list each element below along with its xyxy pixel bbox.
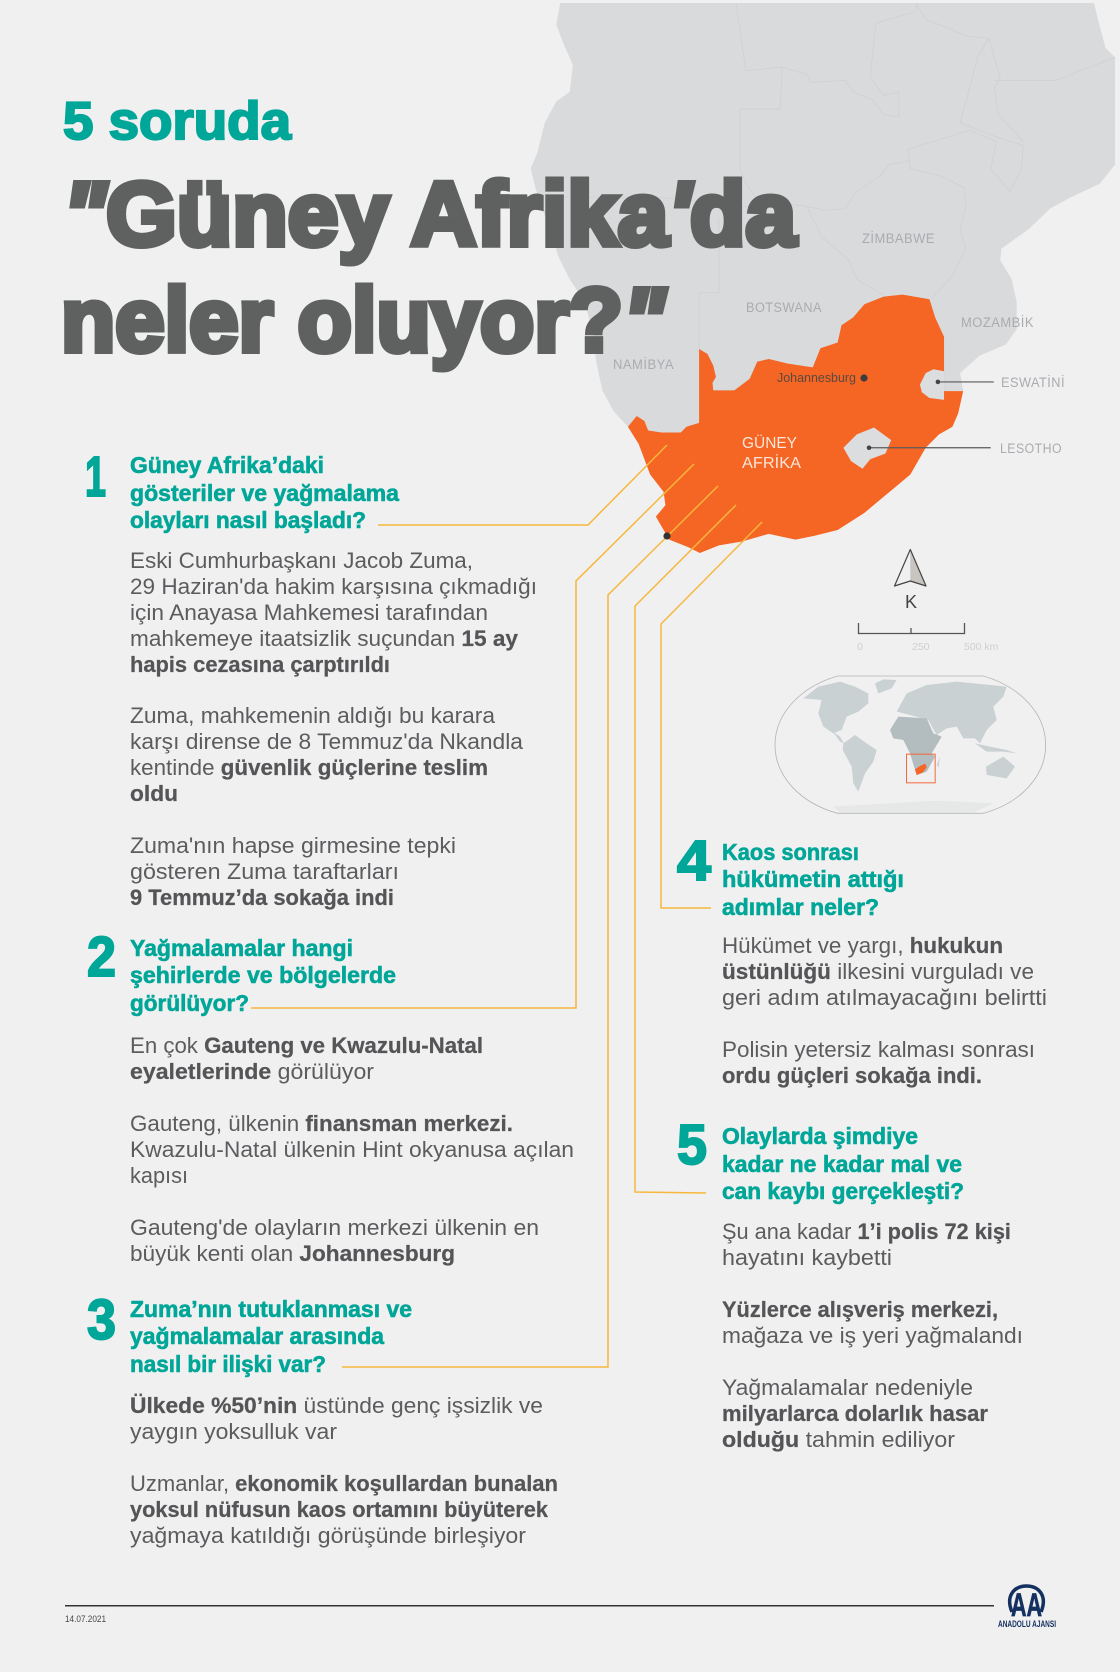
logo: Anadolu Ajansi (998, 1586, 1056, 1630)
answer 5: olduğu tahmin ediliyor (722, 1427, 956, 1452)
number 5: 5 (677, 1113, 707, 1177)
question 3: yağmalamalar arasında (130, 1323, 384, 1349)
answer 1: Zuma, mahkemenin aldığı bu karara (130, 703, 495, 728)
answer 5: hayatını kaybetti (722, 1245, 892, 1270)
question 1: gösteriler ve yağmalama (130, 480, 399, 506)
question 3 (130, 1296, 412, 1377)
answer 2: eyaletlerinde görülüyor (130, 1059, 375, 1084)
answer 3: yaygın yoksulluk var (130, 1419, 338, 1444)
answer 2: Gauteng'de olayların merkezi ülkenin en (130, 1215, 539, 1240)
answer 5: Şu ana kadar 1’i polis 72 kişi (722, 1219, 1011, 1244)
title line 2: neler oluyor?" (61, 271, 666, 371)
answer 2: büyük kenti olan Johannesburg (130, 1241, 455, 1266)
question 4: Kaos sonrası (722, 839, 859, 865)
logo: Anadolu Ajansi: ANADOLU AJANSI (998, 1619, 1056, 1630)
compass (894, 550, 926, 612)
question 1 (130, 452, 399, 533)
answer 3: Ülkede %50’nin üstünde genç işsizlik ve (130, 1393, 543, 1418)
scale bar: 250 (912, 641, 930, 653)
map labels: ESWATİNİ (1001, 375, 1065, 390)
section 2 (87, 925, 574, 1266)
answer 5: milyarlarca dolarlık hasar (722, 1401, 988, 1426)
answer 5: Yüzlerce alışveriş merkezi, (722, 1297, 998, 1322)
South Africa (628, 295, 963, 553)
question 3: nasıl bir ilişki var? (130, 1351, 326, 1377)
answer 1: gösteren Zuma taraftarları (130, 859, 399, 884)
answer 5: Yağmalamalar nedeniyle (722, 1375, 973, 1400)
title (61, 92, 797, 371)
section 5 (677, 1113, 1023, 1452)
answer 2: En çok Gauteng ve Kwazulu-Natal (130, 1033, 483, 1058)
leader lines (867, 380, 994, 450)
land mass (531, 3, 1115, 459)
answer 4: üstünlüğü ilkesini vurguladı ve (722, 959, 1034, 984)
answer 4: ordu güçleri sokağa indi. (722, 1063, 982, 1088)
question 2 (130, 935, 396, 1016)
map labels: ZİMBABWE (862, 231, 935, 246)
answer 5 (722, 1219, 1023, 1452)
answer 2 (130, 1033, 574, 1266)
answer 3: Uzmanlar, ekonomik koşullardan bunalan (130, 1471, 558, 1496)
number 4: 4 (677, 829, 711, 893)
question 3: Zuma’nın tutuklanması ve (130, 1296, 412, 1322)
answer 1: 29 Haziran'da hakim karşısına çıkmadığı (130, 574, 537, 599)
map labels: NAMİBYA (613, 357, 674, 372)
question 5: kadar ne kadar mal ve (722, 1151, 962, 1177)
world locator map (775, 676, 1046, 813)
number 2: 2 (87, 925, 116, 989)
answer 4: Hükümet ve yargı, hukukun (722, 933, 1003, 958)
answer 3: yoksul nüfusun kaos ortamını büyüterek (130, 1497, 548, 1522)
answer 2: kapısı (130, 1163, 188, 1188)
map labels: GÜNEY (742, 434, 797, 452)
section 3 (87, 1288, 558, 1548)
answer 3 (130, 1393, 558, 1548)
answer 1: oldu (130, 781, 178, 806)
answer 1: karşı dirense de 8 Temmuz'da Nkandla (130, 729, 523, 754)
answer 4 (722, 933, 1047, 1088)
subtitle: 5 soruda (63, 92, 292, 151)
answer 1: hapis cezasına çarptırıldı (130, 652, 390, 677)
answer 3: yağmaya katıldığı görüşünde birleşiyor (130, 1523, 527, 1548)
country borders (551, 4, 1115, 349)
answer 1 (130, 548, 537, 910)
question 2: görülüyor? (130, 990, 249, 1016)
Eswatini (920, 369, 944, 400)
question 5: can kaybı gerçekleşti? (722, 1178, 964, 1204)
question 5 (722, 1123, 964, 1204)
scale bar: 500 km (964, 641, 999, 653)
scale bar: 0 (857, 641, 863, 653)
number 3: 3 (87, 1288, 116, 1352)
question 2: şehirlerde ve bölgelerde (130, 962, 396, 988)
map labels: AFRİKA (742, 454, 802, 472)
Lesotho (843, 427, 891, 469)
question 4 (722, 839, 904, 920)
answer 2: Gauteng, ülkenin finansman merkezi. (130, 1111, 513, 1136)
answer 2: Kwazulu-Natal ülkenin Hint okyanusa açılan (130, 1137, 574, 1162)
answer 1: Zuma'nın hapse girmesine tepki (130, 833, 456, 858)
scale bar (857, 623, 999, 653)
map labels (613, 231, 1065, 472)
number 1: 1 (85, 445, 106, 509)
answer 5: mağaza ve iş yeri yağmalandı (722, 1323, 1023, 1348)
answer 1: Eski Cumhurbaşkanı Jacob Zuma, (130, 548, 473, 573)
answer 1: kentinde güvenlik güçlerine teslim (130, 755, 488, 780)
question 1: Güney Afrika’daki (130, 452, 324, 478)
question 4: hükümetin attığı (722, 866, 904, 892)
map labels: Johannesburg (777, 370, 856, 385)
connector lines (251, 445, 762, 1367)
question 1: olayları nasıl başladı? (130, 507, 366, 533)
answer 1: 9 Temmuz’da sokağa indi (130, 885, 394, 910)
logo: Anadolu Ajansi: AA (1011, 1587, 1042, 1623)
Cape Town marker (663, 532, 671, 540)
footer rule (65, 1605, 994, 1606)
section 1 (85, 445, 537, 910)
answer 1: için Anayasa Mahkemesi tarafından (130, 600, 488, 625)
date: 14.07.2021 (65, 1614, 106, 1624)
map labels: BOTSWANA (746, 300, 822, 315)
map labels: LESOTHO (1000, 441, 1062, 456)
map labels: MOZAMBİK (961, 315, 1034, 330)
compass: K (905, 592, 917, 612)
section 4 (677, 829, 1047, 1088)
answer 4: geri adım atılmayacağını belirtti (722, 985, 1047, 1010)
answer 4: Polisin yetersiz kalması sonrası (722, 1037, 1035, 1062)
question 2: Yağmalamalar hangi (130, 935, 353, 961)
question 4: adımlar neler? (722, 894, 879, 920)
answer 1: mahkemeye itaatsizlik suçundan 15 ay (130, 626, 518, 651)
map: southern Africa (531, 3, 1115, 553)
title line 1: "Güney Afrika'da (63, 165, 797, 265)
question 5: Olaylarda şimdiye (722, 1123, 918, 1149)
